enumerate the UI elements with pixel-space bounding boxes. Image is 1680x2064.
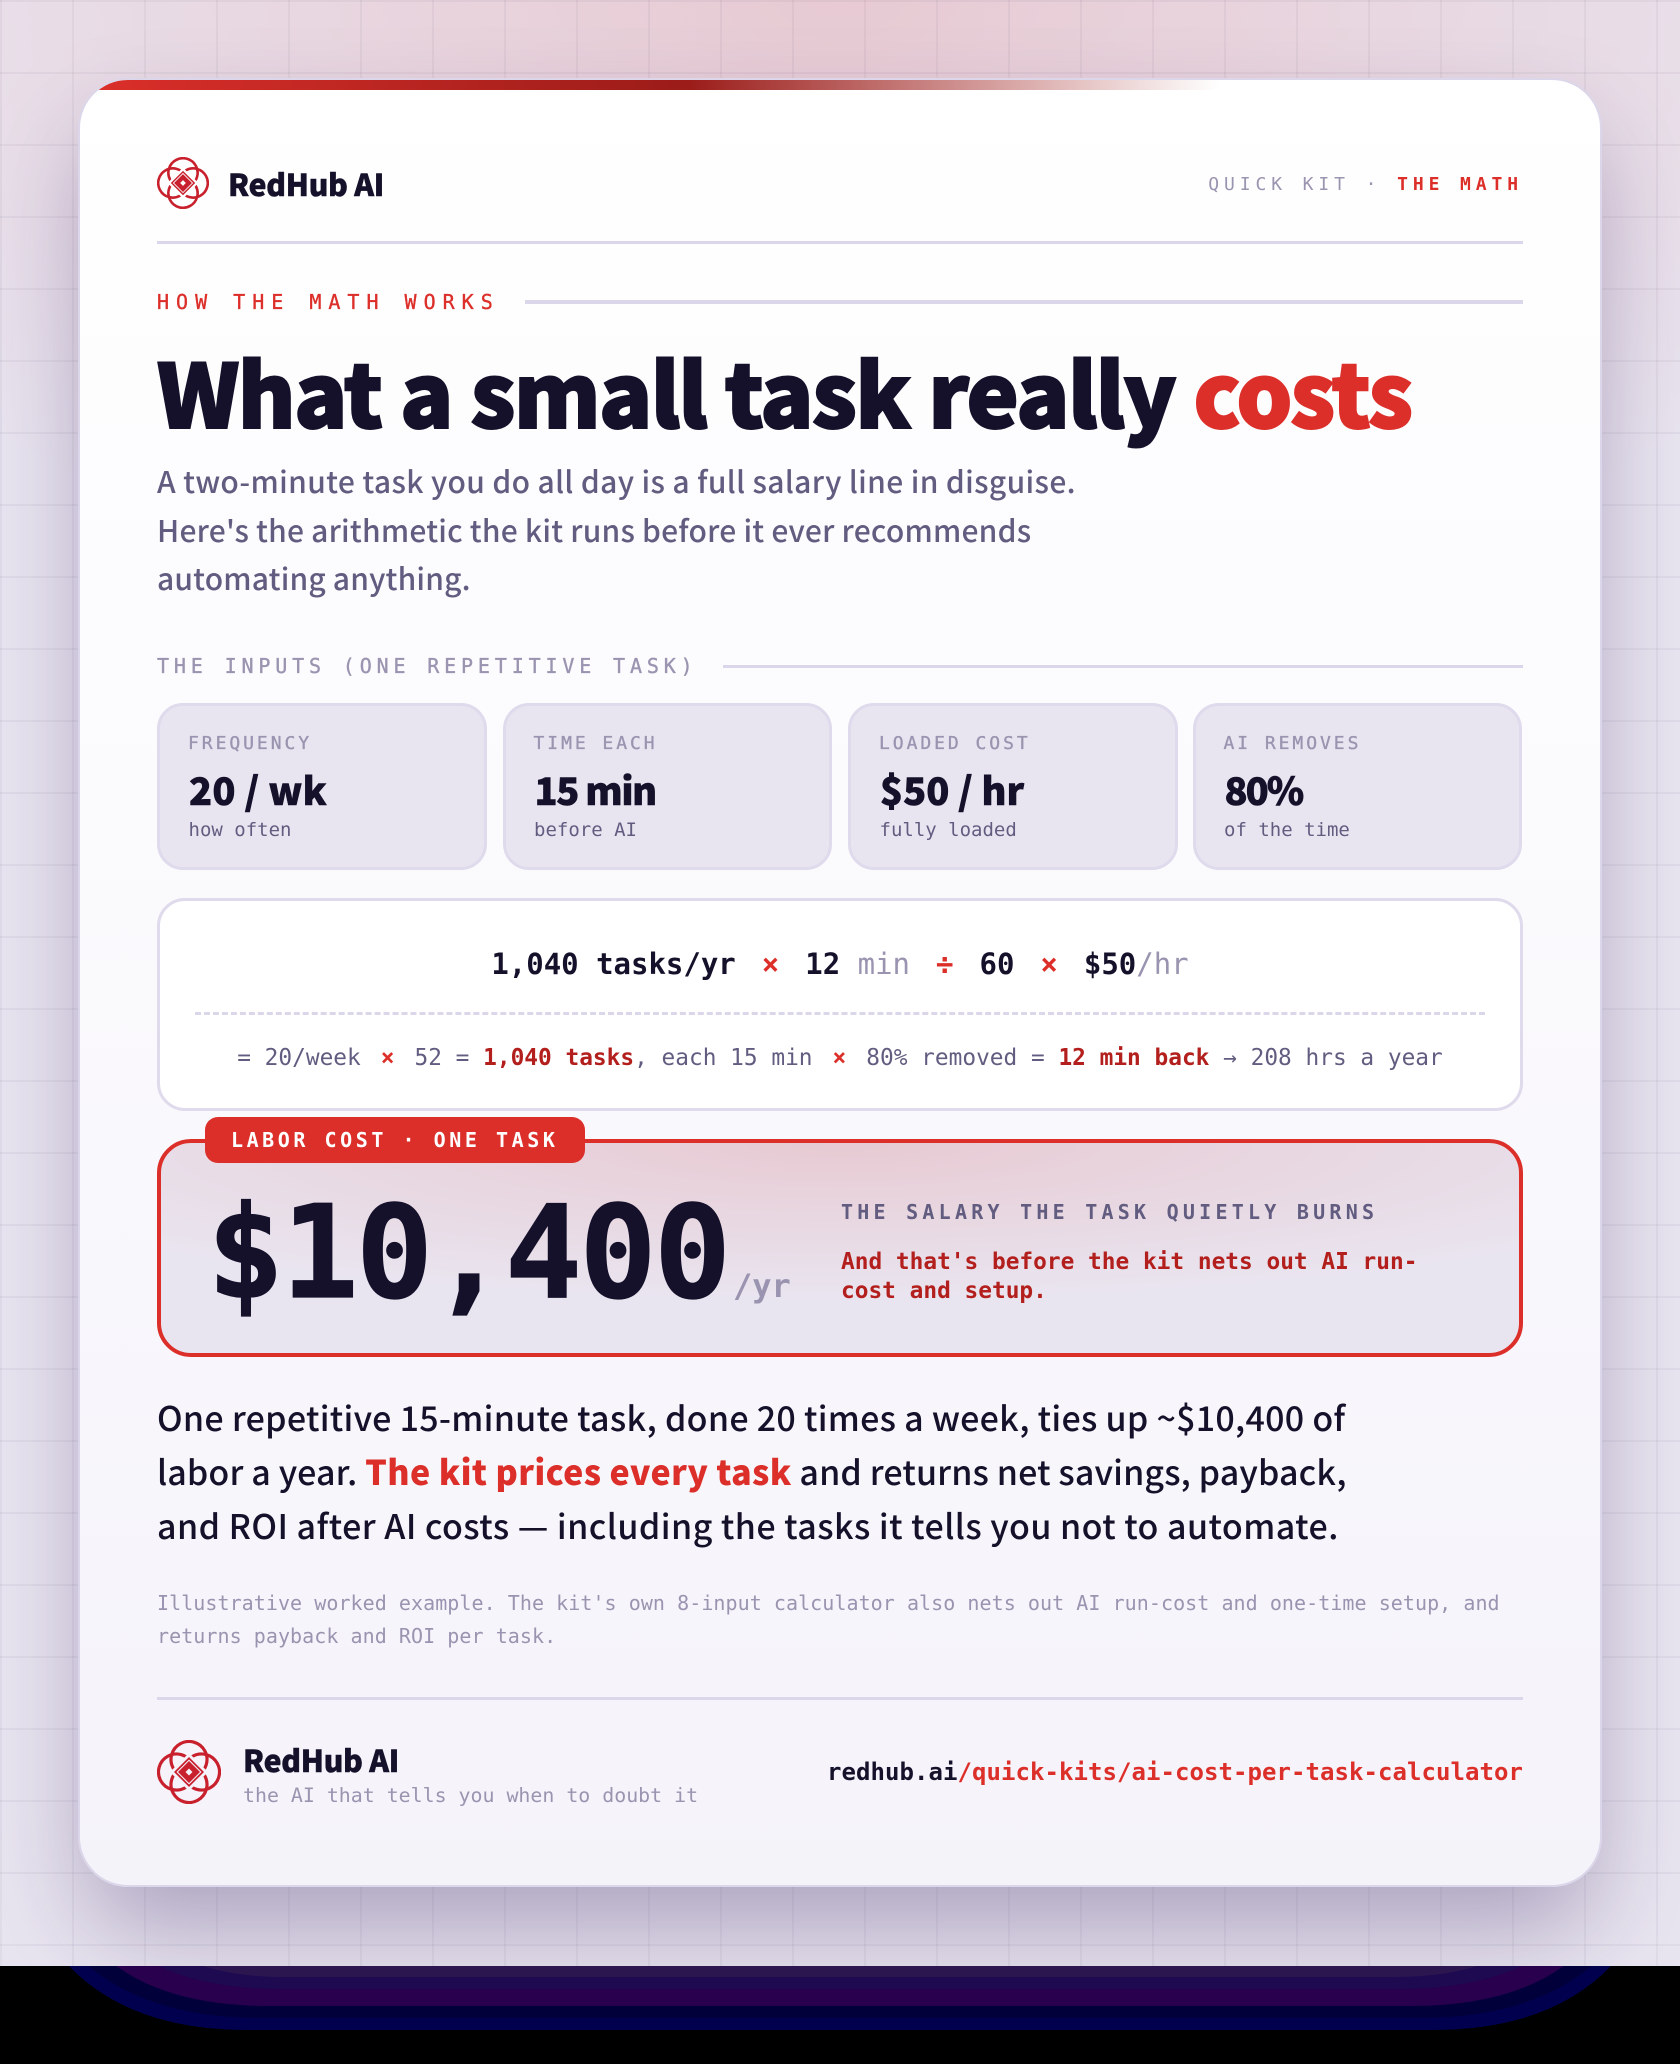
input card: frequency [157,703,486,870]
subtitle [157,458,1076,599]
panel: labor cost [157,1139,1523,1357]
hero note [841,1249,1417,1304]
summary paragraph: One repetitive 15-minute task, done 20 times a week, ties up ~$10,400 of [157,1392,1345,1441]
formula derivation line: = 20/week × 52 = 1,040 tasks, each 15 min × 80% removed = 12 min back → 208 hrs a year [237,1045,1443,1071]
subtitle: A two-minute task you do all day is a full salary line in disguise. [157,458,1076,502]
section label: inputs: THE INPUTS (ONE REPETITIVE TASK) [157,654,698,678]
eyebrow rule [525,300,1523,304]
input card: time each [502,703,832,870]
summary paragraph [157,1392,1347,1549]
frequency note: how often [188,819,291,841]
badge: LABOR COST · ONE TASK [231,1128,558,1152]
footnote: returns payback and ROI per task. [157,1624,556,1648]
eyebrow: HOW THE MATH WORKS [157,290,500,314]
formula main line: 1,040 tasks/yr × 12 min ÷ 60 × $50/hr [491,947,1189,981]
summary paragraph: and ROI after AI costs — including the tasks it tells you not to automate. [157,1500,1339,1549]
cost label: LOADED COST [879,733,1031,754]
footer url: redhub.ai/quick-kits/ai-cost-per-task-calculator [827,1758,1523,1786]
footer brand name: RedHub AI [243,1737,399,1781]
summary paragraph: labor a year. The kit prices every task and returns net savings, payback, [157,1446,1347,1495]
frequency value: 20 / wk [189,761,327,816]
hero title: THE SALARY THE TASK QUIETLY BURNS [841,1200,1378,1224]
header divider [157,241,1523,244]
input card: loaded cost [848,703,1178,870]
footnote: Illustrative worked example. The kit's own 8-input calculator also nets out AI run-cost and one-time setup, and [157,1591,1500,1615]
footnote [157,1591,1500,1648]
AI label: AI REMOVES [1224,733,1361,754]
footer tagline: the AI that tells you when to doubt it [243,1784,698,1807]
hero note: cost and setup. [841,1278,1047,1304]
big number: $10,400 [207,1179,729,1328]
subtitle: automating anything. [157,555,471,599]
frequency label: FREQUENCY [188,733,312,754]
time label: TIME EACH [534,733,658,754]
AI value: 80% [1224,761,1302,816]
cost note: fully loaded [880,819,1017,841]
cost value: $50 / hr [880,761,1024,816]
header brand name: RedHub AI [228,161,384,205]
panel: formula [157,898,1523,1111]
per year unit: /yr [733,1267,791,1305]
time note: before AI [534,819,637,841]
top accent bar [80,80,1600,90]
footer divider [157,1697,1523,1700]
subtitle: Here's the arithmetic the kit runs before it ever recommends [157,506,1031,550]
hero note: And that's before the kit nets out AI run- [841,1249,1417,1275]
AI note: of the time [1224,819,1350,841]
badge [205,1117,585,1163]
time value: 15 min [534,761,656,816]
input card: AI removes [1192,703,1522,870]
shadow bands below the page [69,1966,1611,2030]
footer logo [157,1740,221,1804]
title: What a small task really costs [157,327,1412,454]
header logo [157,157,209,209]
formula dashed divider [195,1012,1485,1015]
section rule [723,665,1523,668]
panel: main card [78,78,1602,1887]
header kit tag: QUICK KIT · THE MATH [1208,174,1523,195]
